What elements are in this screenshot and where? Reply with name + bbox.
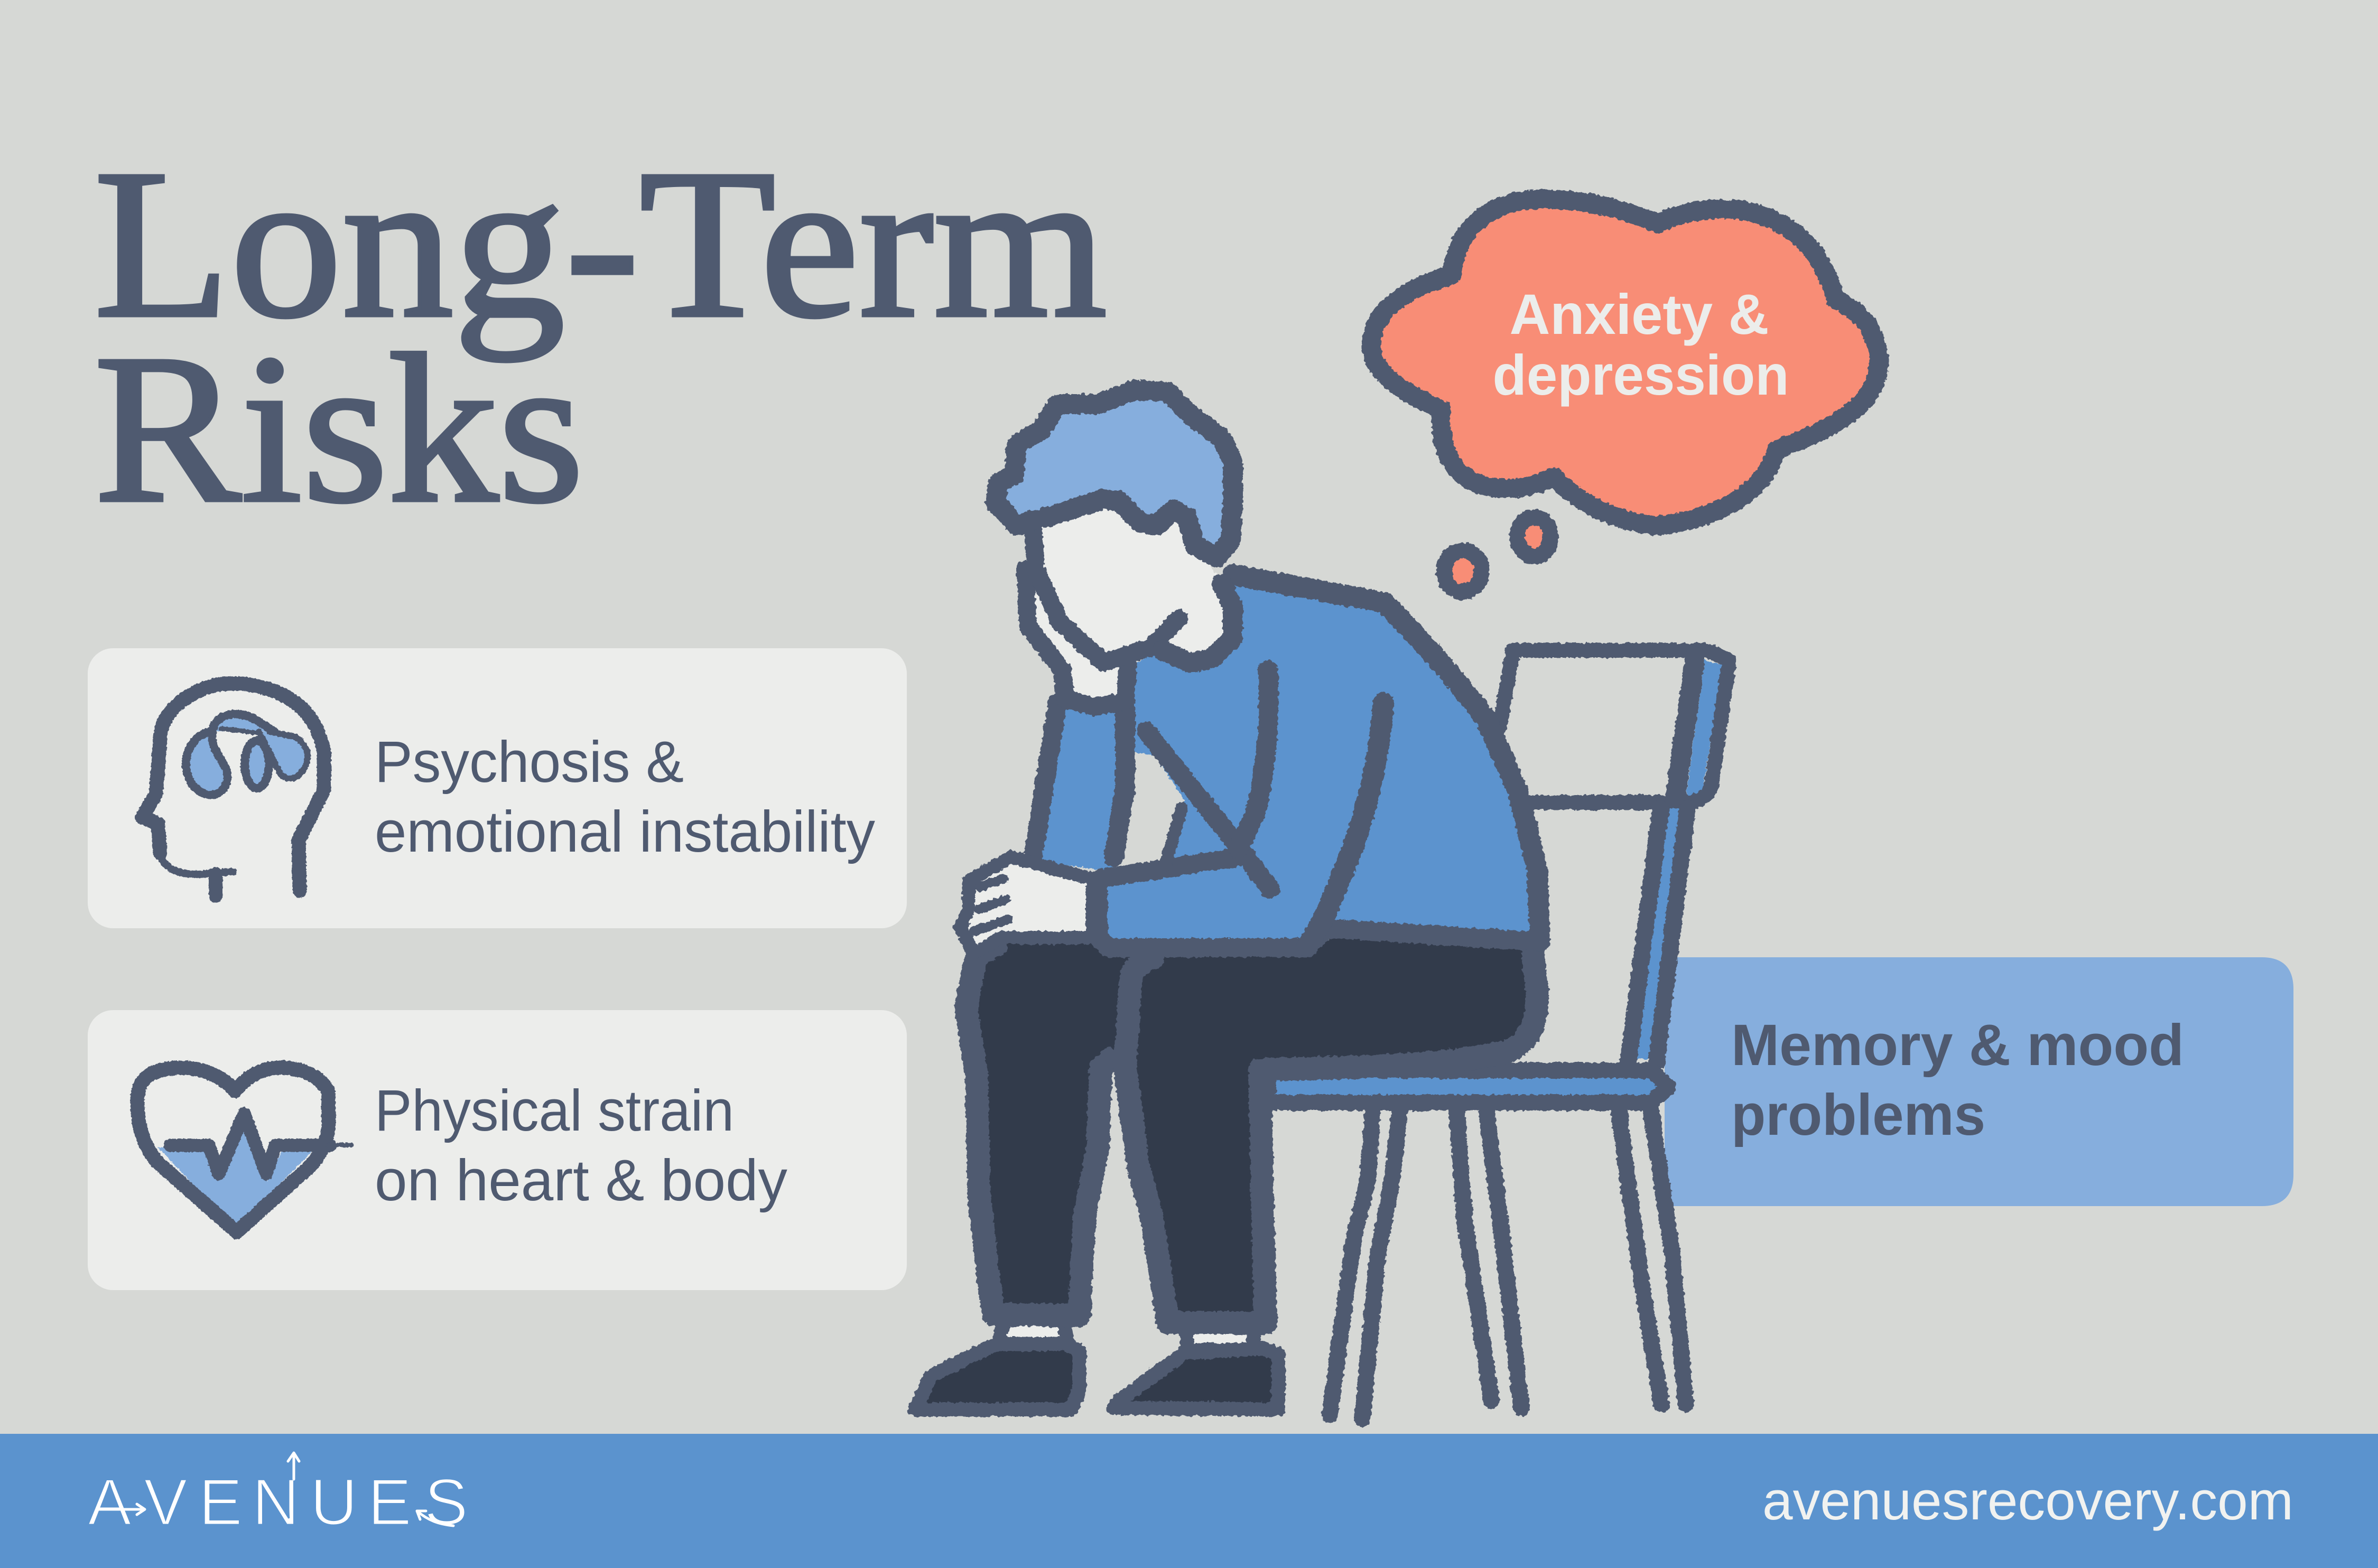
hair <box>996 390 1233 557</box>
chair back <box>1686 660 1722 798</box>
chair legs <box>1330 1107 1373 1415</box>
text: physical strain: Physical strain <box>375 1078 734 1143</box>
trousers <box>966 932 1539 1323</box>
title: Risks <box>94 311 584 547</box>
chair upright <box>1636 808 1680 1059</box>
text: anxiety and depression: Anxiety & <box>1509 282 1769 346</box>
text: physical strain <box>375 1078 787 1213</box>
thought bubble <box>1371 199 1879 592</box>
card background <box>88 648 907 928</box>
shoes and socks <box>915 1315 1278 1410</box>
card background <box>1665 957 2293 1206</box>
title: Long-Term <box>94 126 1107 362</box>
text: physical strain: on heart & body <box>375 1148 787 1213</box>
shirt <box>1033 575 1540 948</box>
text: psychosis and emotional instability <box>375 730 875 864</box>
card background <box>88 1010 907 1290</box>
footer band <box>0 1434 2378 1568</box>
text: psychosis and emotional instability: Psychosis & <box>375 730 684 795</box>
panel: memory and mood problems <box>1665 957 2293 1206</box>
chair seat <box>1268 1070 1668 1103</box>
hand under cheek <box>1025 570 1128 707</box>
face <box>1033 502 1233 662</box>
logo: Avenues: AVENUES <box>88 1466 468 1539</box>
panel: physical strain <box>88 1010 907 1290</box>
text: memory and mood problems <box>1731 1013 2184 1147</box>
website url: avenuesrecovery.com <box>1762 1470 2293 1531</box>
title <box>94 126 1107 547</box>
gap between arm and torso <box>1114 752 1184 869</box>
text: memory and mood problems: Memory & mood <box>1731 1013 2184 1078</box>
resting hand on knee <box>960 857 1092 954</box>
text: anxiety and depression <box>1492 282 1789 407</box>
illustration: seated man on chair <box>915 390 1729 1418</box>
text: anxiety and depression: depression <box>1492 343 1789 407</box>
panel: psychosis and emotional instability <box>88 648 907 928</box>
small thought bubbles <box>1444 517 1551 592</box>
text: psychosis and emotional instability: emotional instability <box>375 799 875 864</box>
icon: head with squiggle <box>142 684 324 896</box>
text: memory and mood problems: problems <box>1731 1082 1985 1147</box>
chair <box>1268 650 1729 1418</box>
cloud <box>1371 199 1879 526</box>
icon: heart with pulse <box>137 1068 351 1232</box>
